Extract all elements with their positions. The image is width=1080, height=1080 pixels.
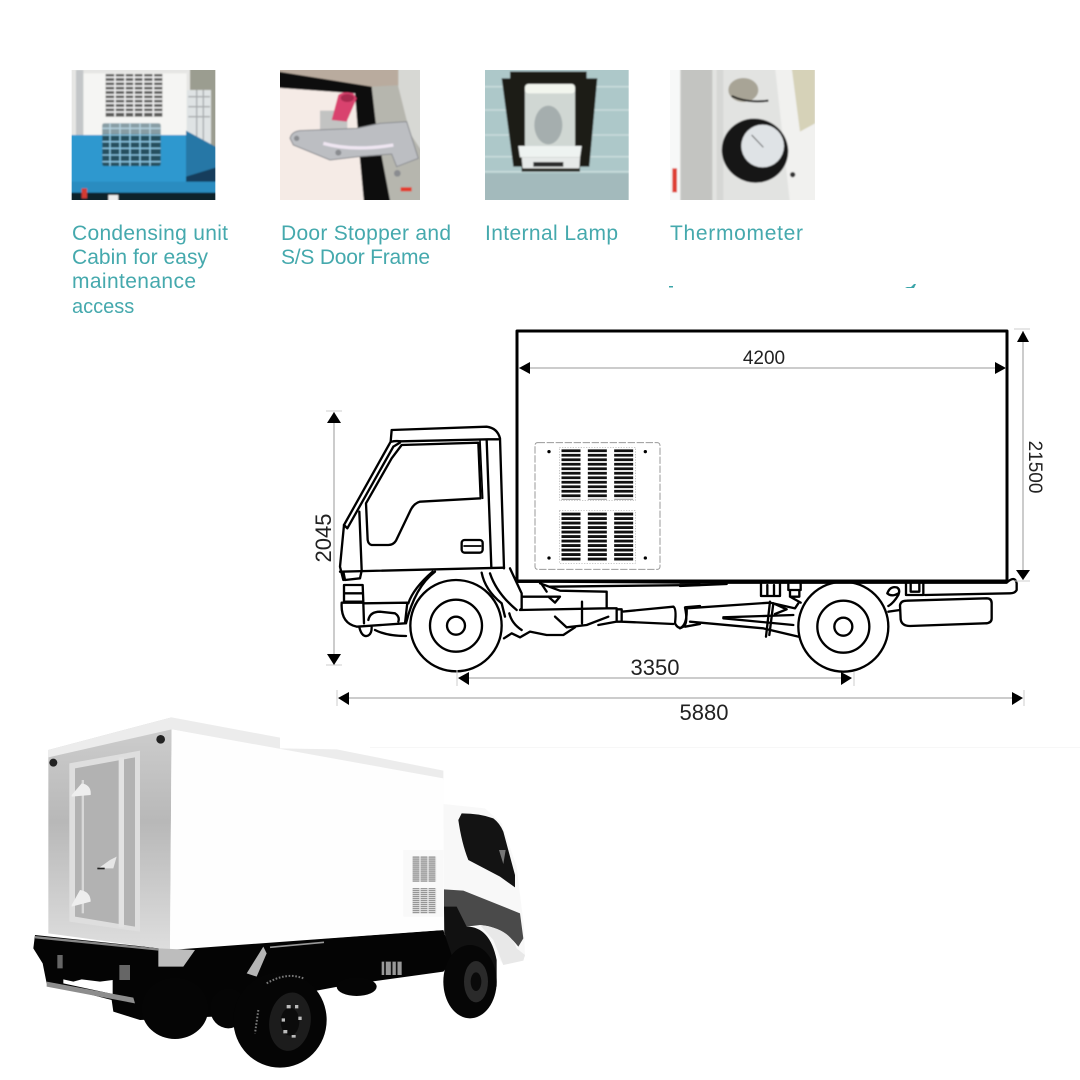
dimension lines [326,329,1030,706]
dimension: 3350: 3350 [631,655,679,680]
faint horizon line [370,747,1080,748]
cargo box outline [517,331,1007,581]
text: condensing unit caption: maintenance [72,270,196,293]
photo: thermometer [667,67,818,203]
dimension: 4200: 4200 [743,348,785,369]
photo: door stopper and frame [277,67,423,203]
side vents [403,850,443,917]
dimension arrowheads [327,331,1030,705]
text: door stopper caption: Door Stopper and [281,222,451,245]
refrigeration vent panel [535,443,660,569]
rear chassis and wheel [680,579,1017,672]
wheels [142,945,497,1068]
text: door stopper caption: S/S Door Frame [281,246,430,269]
photo: condensing unit [68,67,219,203]
text: internal lamp caption: Internal Lamp [485,222,618,245]
chassis and underbody [33,930,453,1020]
text: condensing unit caption: access [72,296,134,318]
dimension: 5880: 5880 [680,700,728,725]
text: condensing unit caption: Cabin for easy [72,246,208,269]
text: condensing unit caption: Condensing unit [72,222,228,245]
box: roof edge [48,717,443,780]
technical side-view drawing [311,329,1045,725]
dimension: 2045: 2045 [311,514,336,562]
truck cab and front chassis [340,427,700,671]
rear bumper and step details [35,936,402,1003]
clipped caption remnants [669,284,916,288]
truck cab [443,804,525,987]
dimension: 21500: 21500 [1024,441,1045,493]
text: thermometer caption: Thermometer [670,222,803,245]
box: rear face [48,717,172,950]
photo: internal lamp [482,67,632,203]
gap above rear step [63,979,113,994]
rear door [49,735,165,932]
photo: refrigerated truck, rear three-quarter view [33,717,525,1068]
box: side wall [170,729,444,950]
